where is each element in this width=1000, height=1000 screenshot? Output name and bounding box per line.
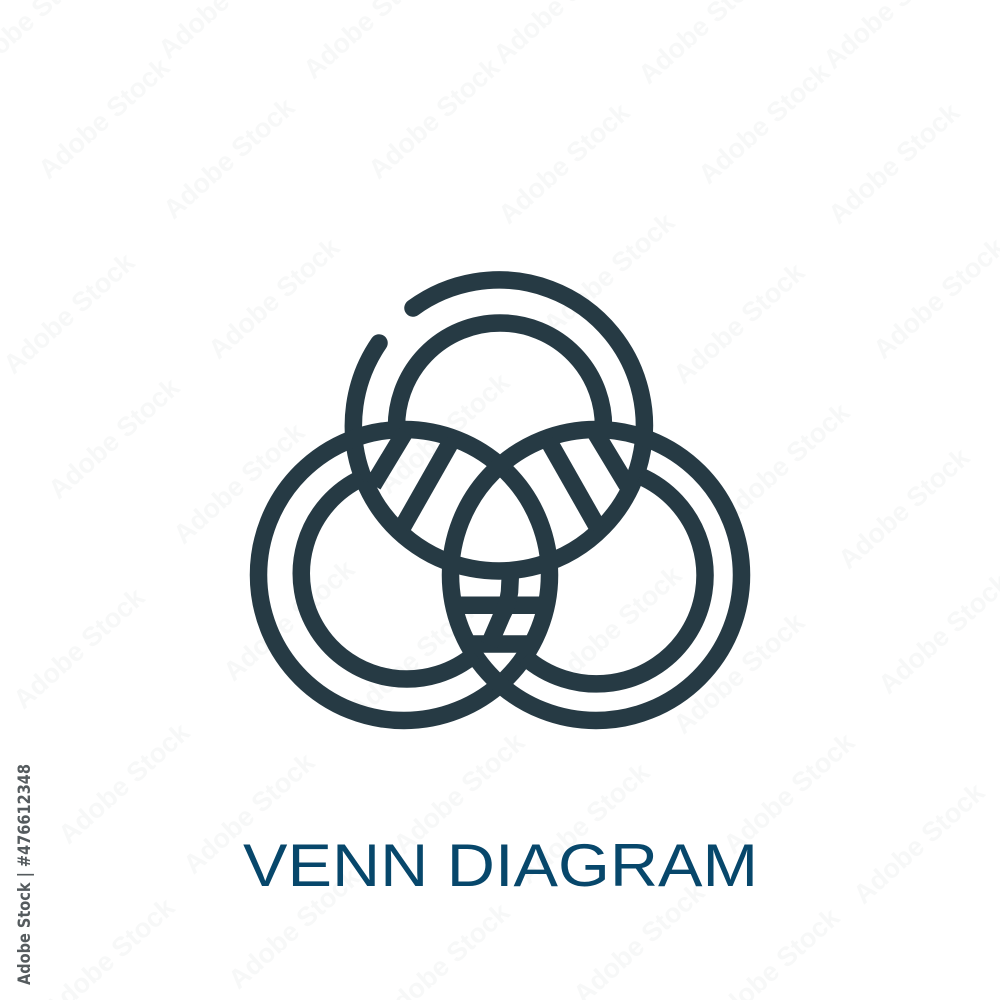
infographic canvas: Adobe Stock — [158, 91, 301, 225]
infographic canvas: Adobe Stock — [363, 51, 506, 185]
title: VENN DIAGRAM — [243, 832, 758, 899]
infographic canvas: Adobe Stock — [0, 246, 141, 380]
infographic canvas: Adobe Stock — [545, 559, 688, 693]
stock id caption: Adobe Stock | #476612348 — [15, 764, 35, 985]
infographic canvas: Adobe Stock — [538, 206, 681, 340]
infographic canvas: Adobe Stock — [178, 746, 321, 880]
icon: venn diagram — [258, 280, 742, 720]
top circle outer ring with gap — [353, 280, 644, 571]
infographic canvas: Adobe Stock — [388, 726, 531, 860]
infographic canvas: Adobe Stock — [513, 756, 656, 890]
lower left circle outer ring — [258, 430, 550, 720]
infographic canvas: Adobe Stock — [718, 726, 861, 860]
infographic canvas: Adobe Stock — [343, 591, 486, 725]
infographic canvas: Adobe Stock — [693, 56, 836, 190]
infographic canvas: Adobe Stock — [848, 776, 991, 910]
infographic canvas: Adobe Stock — [203, 231, 346, 365]
lower right circle outer ring — [450, 430, 742, 720]
lower lens stripes — [450, 572, 550, 645]
infographic canvas: Adobe Stock — [223, 861, 366, 995]
infographic canvas: Adobe Stock — [218, 553, 361, 687]
lower left circle inner arc — [301, 478, 475, 679]
infographic canvas: Adobe Stock — [53, 716, 196, 850]
left overlap stripes — [373, 432, 452, 528]
lower right circle inner arc — [525, 476, 705, 684]
infographic canvas: Adobe Stock — [168, 416, 311, 550]
infographic canvas: Adobe Stock — [713, 396, 856, 530]
infographic canvas: Adobe Stock — [668, 256, 811, 390]
infographic canvas: Adobe Stock — [833, 441, 976, 575]
infographic canvas: Adobe Stock — [668, 606, 811, 740]
infographic canvas: Adobe Stock — [373, 366, 516, 500]
infographic canvas: Adobe Stock — [823, 96, 966, 230]
right overlap stripes — [548, 432, 627, 528]
infographic canvas: Adobe Stock — [8, 581, 151, 715]
infographic canvas: Adobe Stock — [33, 51, 176, 185]
top circle inner arc — [396, 323, 604, 431]
infographic canvas: Adobe Stock — [493, 96, 636, 230]
infographic canvas: Adobe Stock — [43, 371, 186, 505]
